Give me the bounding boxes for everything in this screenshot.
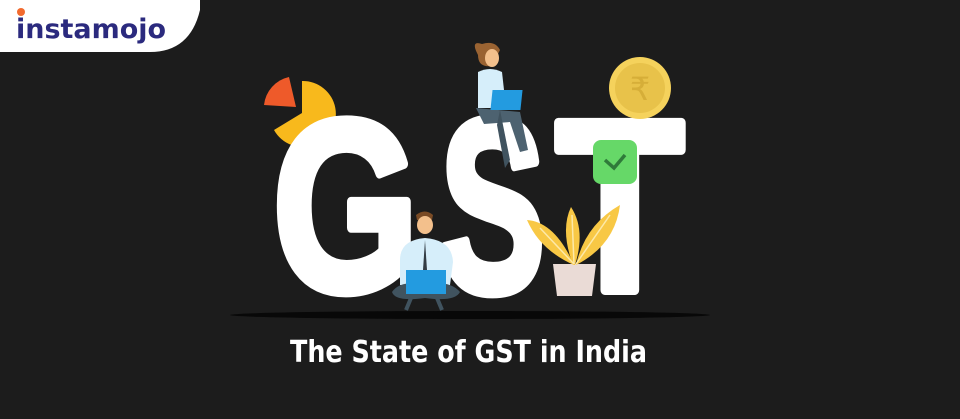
ground shadow	[230, 311, 710, 319]
logo text: instamojo	[16, 14, 166, 45]
icon: pie chart	[264, 77, 336, 147]
woman sitting with laptop	[475, 43, 528, 168]
icon: green check box	[593, 140, 637, 184]
GST letters: G	[273, 70, 419, 342]
logo panel	[0, 0, 200, 52]
GST letters	[273, 68, 684, 343]
icon: rupee coin: ₹	[630, 70, 650, 108]
icon: rupee coin	[609, 57, 671, 119]
man sitting cross-legged with laptop	[392, 212, 460, 310]
plant in pot	[527, 205, 620, 296]
GST letters: S	[440, 68, 545, 343]
title: The State of GST in India	[290, 335, 647, 370]
GST letters: T	[556, 71, 684, 343]
